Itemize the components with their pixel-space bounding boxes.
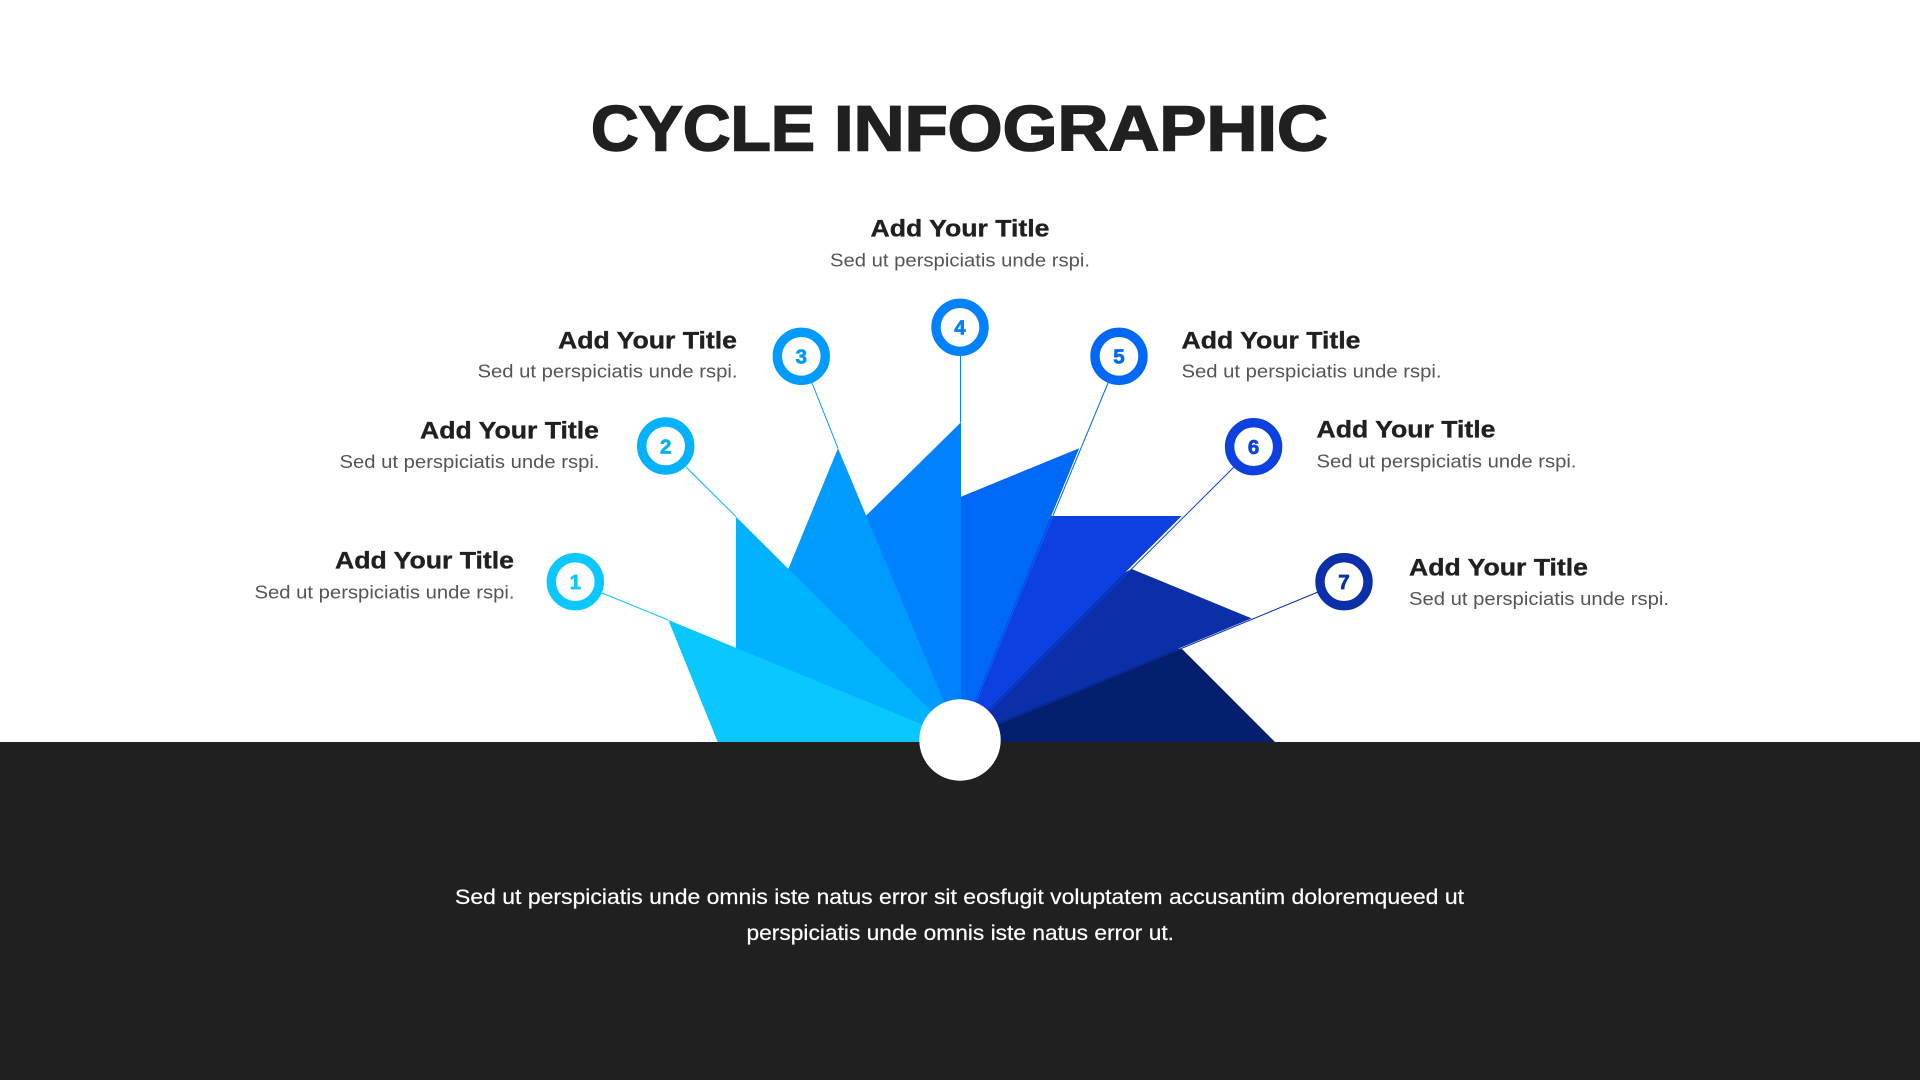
- step 2 marker: 2: [660, 435, 671, 458]
- step 7 label: Sed ut perspiciatis unde rspi.: [1409, 588, 1669, 609]
- petal 2: [736, 517, 960, 740]
- step 6 label: [1316, 417, 1576, 471]
- step 5 label: Add Your Title: [1182, 327, 1360, 354]
- step 1 marker: 1: [570, 571, 581, 594]
- step 3 label: [478, 327, 738, 382]
- step 2 marker: [642, 422, 736, 517]
- step 7 label: Add Your Title: [1409, 555, 1588, 582]
- petal 6: [950, 516, 1182, 739]
- step 5 marker: 5: [1113, 346, 1125, 369]
- step 4 label: [830, 216, 1090, 271]
- dark footer band: [0, 742, 1920, 1080]
- step 5 label: [1182, 327, 1442, 382]
- step 4 marker: [936, 303, 984, 422]
- step 3 label: Add Your Title: [558, 327, 737, 354]
- step 6 label: Add Your Title: [1316, 417, 1496, 444]
- step 4 label: Add Your Title: [870, 216, 1050, 243]
- step 2 label: Sed ut perspiciatis unde rspi.: [340, 451, 600, 472]
- step 2 label: Add Your Title: [420, 418, 599, 445]
- step 7 label: [1409, 555, 1669, 609]
- footer text: [455, 886, 1464, 945]
- step 5 marker: [960, 332, 1143, 740]
- petal 8: [955, 648, 1275, 742]
- step 6 marker: [960, 423, 1278, 740]
- step 3 label: Sed ut perspiciatis unde rspi.: [478, 361, 738, 382]
- step 4 marker: 4: [954, 317, 966, 340]
- step 4 label: Sed ut perspiciatis unde rspi.: [830, 250, 1090, 271]
- title: [591, 92, 1328, 164]
- center white circle: [919, 699, 1001, 781]
- step 1 marker: [551, 558, 668, 620]
- step 7 marker: 7: [1338, 571, 1350, 594]
- fan chart: [668, 422, 1275, 742]
- step 5 label: Sed ut perspiciatis unde rspi.: [1182, 361, 1442, 382]
- footer text: perspiciatis unde omnis iste natus error ut.: [746, 922, 1174, 945]
- footer text: Sed ut perspiciatis unde omnis iste natus error sit eosfugit voluptatem accusantim doloremqueed ut: [455, 886, 1464, 909]
- petal 1: [668, 620, 960, 742]
- petal 3: [785, 448, 960, 740]
- step 7 marker: [960, 558, 1368, 740]
- petal 5: [959, 448, 1079, 740]
- step 6 label: Sed ut perspiciatis unde rspi.: [1316, 450, 1576, 471]
- step 3 marker: 3: [796, 346, 807, 369]
- petal 7: [950, 569, 1252, 739]
- step 6 marker: 6: [1248, 436, 1259, 459]
- petal 4: [862, 422, 961, 740]
- step 1 label: [254, 547, 514, 602]
- title: CYCLE: [591, 92, 815, 164]
- step 1 label: Add Your Title: [335, 547, 514, 574]
- step 2 label: [340, 418, 600, 472]
- title: INFOGRAPHIC: [834, 92, 1328, 164]
- step 3 marker: [777, 332, 838, 448]
- step 1 label: Sed ut perspiciatis unde rspi.: [254, 581, 514, 602]
